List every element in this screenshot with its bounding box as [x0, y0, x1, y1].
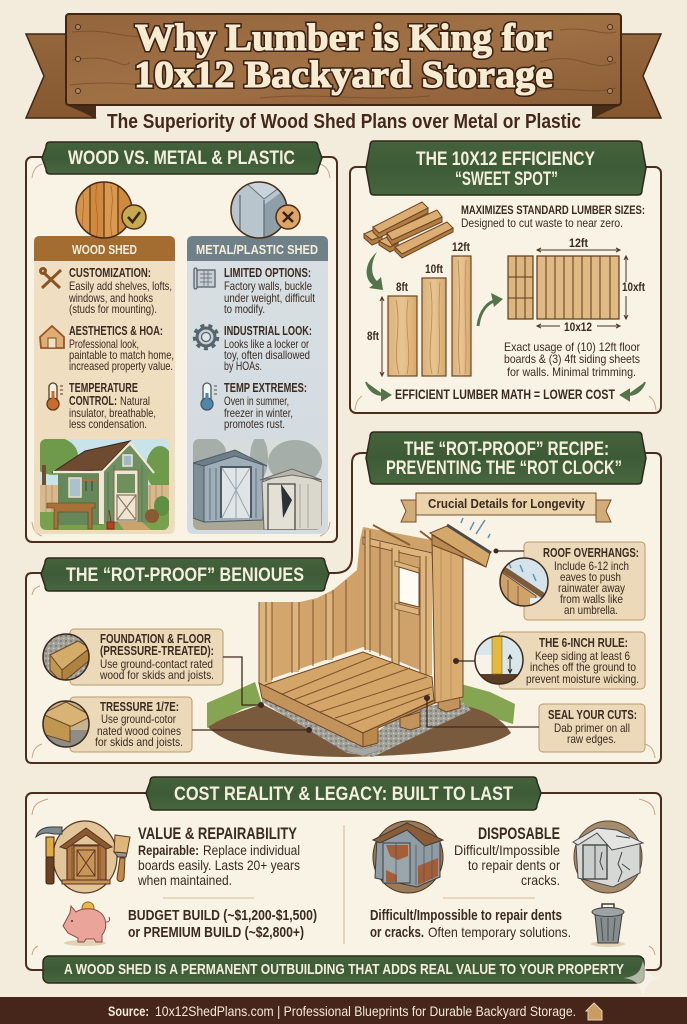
floor and siding layout diagram: 10xft [622, 280, 645, 294]
callout: roof overhangs: eaves to push [560, 570, 621, 584]
disposable text: cracks. [521, 872, 560, 888]
banner: permanent outbuilding statement [43, 956, 644, 983]
limited options item: LIMITED OPTIONS: [224, 266, 311, 280]
temperature control item: TEMPERATURE [69, 381, 138, 395]
metal and plastic shed column [187, 236, 328, 534]
callout: roof overhangs: rainwater away [558, 581, 625, 595]
icon: wood grain circle with check [76, 182, 146, 238]
board lengths diagram: 8ft [396, 280, 408, 294]
disposable text: Difficult/Impossible [454, 842, 560, 858]
panel: wood vs metal and plastic [26, 142, 337, 542]
panel heading [366, 141, 646, 195]
banner right tail [592, 34, 661, 118]
value and repairability text: when maintained. [137, 872, 232, 888]
callout: foundation and floor: wood for skids and joists. [99, 668, 214, 682]
callout: foundation and floor: Use ground-contact rated [100, 657, 213, 671]
disposable text [454, 825, 560, 888]
callout: seal your cuts: SEAL YOUR CUTS: [548, 708, 637, 722]
budget and premium text: BUDGET BUILD (~$1,200-$1,500) [128, 908, 317, 924]
callout: the 6-inch rule: inches off the ground to [530, 660, 636, 674]
icon: piggy bank with coin [63, 902, 110, 946]
panel heading: COST REALITY & LEGACY: BUILT TO LAST [174, 784, 513, 805]
icon: footer house [586, 1003, 602, 1020]
limited options item: to modify. [224, 302, 265, 316]
lumber sizes text [461, 203, 645, 230]
temperature control item: CONTROL: [69, 394, 117, 408]
budget and premium text [128, 908, 317, 941]
value and repairability text: VALUE & REPAIRABILITY [138, 825, 297, 843]
arrow: left math arrow [366, 382, 390, 400]
aesthetics and HOA item [40, 324, 174, 373]
customization item: windows, and hooks [68, 291, 153, 305]
industrial look item: Looks like a locker or [224, 337, 309, 351]
icon: rusty metal shed [373, 821, 443, 893]
callout: tressure: Use ground-cotor [101, 712, 176, 726]
panel frame [26, 157, 337, 542]
ribbon: crucial details: Crucial Details for Longevity [428, 496, 586, 511]
panel: cost reality and legacy [26, 777, 661, 970]
limited options item: Factory walls, buckle [224, 279, 312, 293]
callout: seal your cuts: raw edges. [567, 732, 616, 746]
window opening [399, 567, 419, 607]
icon: crossed tools [40, 268, 61, 288]
icon: lumber pile [364, 202, 453, 258]
aesthetics and HOA item: AESTHETICS & HOA: [69, 324, 163, 338]
watermark sparkle [623, 960, 661, 997]
floor and siding layout diagram: 10x12 [564, 320, 592, 334]
callout: the 6-inch rule: THE 6-INCH RULE: [539, 636, 628, 650]
temp extremes item: Oven in summer, [224, 394, 289, 408]
aesthetics and HOA item: paintable to match home, [69, 348, 174, 362]
value and repairability text: Replace individual [203, 842, 300, 858]
customization item: CUSTOMIZATION: [69, 266, 151, 280]
callout: foundation and floor: (PRESSURE-TREATED): [100, 644, 214, 658]
ribbon: crucial details [401, 493, 611, 522]
panel heading: benefits: THE “ROT-PROOF” BENIOUES [66, 565, 304, 586]
board lengths diagram [367, 240, 471, 376]
callout: the 6-inch rule [475, 632, 645, 689]
arrow: right math arrow [621, 382, 645, 400]
industrial look item: toy, often disallowed [224, 348, 310, 362]
difficult to repair text [370, 908, 571, 941]
customization item: (studs for mounting). [69, 302, 157, 316]
icon: warm thermometer [47, 383, 63, 410]
exact usage text: boards & (3) 4ft siding sheets [504, 352, 640, 366]
footer: Source: [108, 1003, 149, 1019]
callout: roof overhangs: Include 6-12 inch [554, 559, 629, 573]
efficient lumber math statement: EFFICIENT LUMBER MATH = LOWER COST [395, 386, 615, 402]
budget and premium text: or PREMIUM BUILD (~$2,800+) [128, 925, 304, 941]
icon: gear [194, 326, 218, 348]
illustration: damaged metal and plastic sheds [186, 436, 322, 530]
icon: joist on block [42, 701, 92, 750]
footer: 10x12ShedPlans.com | Professional Blueprints for Durable Backyard Storage. [155, 1003, 576, 1019]
panel frame [26, 793, 661, 970]
customization item: Easily add shelves, lofts, [69, 279, 172, 293]
customization item [40, 266, 172, 316]
panel heading: recipe [366, 432, 646, 484]
panel heading: WOOD VS. METAL & PLASTIC [68, 148, 295, 169]
difficult to repair text: Often temporary solutions. [428, 924, 571, 940]
lumber sizes text: Designed to cut waste to near zero. [461, 216, 623, 230]
value and repairability text: Repairable: [138, 842, 199, 858]
callout: roof overhangs: from walls like [560, 592, 623, 606]
callout: roof overhangs: an umbrella. [564, 603, 618, 617]
callout: roof overhangs [498, 542, 645, 620]
panel heading [146, 777, 541, 810]
banner left tail [26, 34, 96, 118]
panel heading: recipe: PREVENTING THE “ROT CLOCK” [386, 458, 622, 479]
callout: seal your cuts [539, 704, 645, 752]
icon: metal corner circle with cross [231, 182, 300, 238]
panel: rot-proof recipe [26, 432, 661, 763]
board lengths diagram: 8ft [367, 329, 379, 343]
callout: foundation and floor [43, 629, 223, 685]
subtitle: The Superiority of Wood Shed Plans over Metal or Plastic [107, 111, 581, 133]
temperature control item: less condensation. [69, 417, 147, 431]
arrow: pile to boards [367, 252, 383, 290]
connector lines with dots [192, 548, 539, 733]
panel heading: recipe: THE “ROT-PROOF” RECIPE: [404, 439, 609, 460]
value and repairability text: boards easily. Lasts 20+ years [138, 857, 300, 873]
illustration: ground [207, 682, 515, 757]
callout: foundation and floor: FOUNDATION & FLOOR [100, 632, 211, 646]
panel heading: benefits [41, 558, 329, 591]
icon: house [40, 326, 64, 348]
temp extremes item: freezer in winter, [224, 406, 293, 420]
disposable text: DISPOSABLE [478, 825, 560, 843]
callout: seal your cuts: Dab primer on all [554, 721, 630, 735]
board lengths diagram: 10ft [425, 262, 443, 276]
aesthetics and HOA item: increased property value. [69, 359, 173, 373]
icon: trash can [591, 904, 625, 947]
exact usage text: for walls. Minimal trimming. [507, 365, 636, 379]
floor and siding layout diagram [508, 236, 645, 334]
temperature control item: Natural [120, 394, 150, 408]
temperature control item [47, 381, 156, 431]
illustration: open shed frame [259, 518, 491, 756]
limited options item: under weight, difficult [224, 291, 316, 305]
temp extremes item [201, 381, 307, 431]
callout: the 6-inch rule: Keep siding at least 6 [535, 649, 630, 663]
exact usage text [504, 340, 640, 379]
panel frame [350, 167, 661, 413]
value and repairability text [137, 825, 300, 888]
callout: the 6-inch rule: prevent moisture wicking. [526, 672, 639, 686]
icon: cracked plastic shed [573, 821, 643, 893]
icon: ruler at siding [475, 636, 523, 686]
icon: treated timber on gravel [43, 634, 90, 683]
industrial look item [194, 324, 312, 373]
industrial look item: by HOAs. [224, 359, 262, 373]
icon: blueprint [194, 268, 215, 289]
temp extremes item: TEMP EXTREMES: [224, 381, 307, 395]
difficult to repair text: Difficult/Impossible to repair dents [370, 908, 562, 924]
arrow: boards to layout [478, 300, 497, 326]
wood shed column: WOOD SHED [72, 242, 137, 257]
metal and plastic shed column: METAL/PLASTIC SHED [196, 242, 318, 257]
callout: tressure [42, 697, 192, 752]
board lengths diagram: 12ft [452, 240, 470, 254]
difficult to repair text: or cracks. [370, 925, 424, 941]
footer [0, 997, 687, 1024]
panel heading: “SWEET SPOT” [455, 169, 558, 190]
title banner [26, 14, 661, 118]
exact usage text: Exact usage of (10) 12ft floor [504, 340, 640, 354]
floor and siding layout diagram: 12ft [569, 236, 588, 250]
callout: roof overhangs: ROOF OVERHANGS: [543, 546, 639, 560]
callout: tressure: nated wood coines [97, 724, 181, 738]
panel: 10x12 efficiency sweet spot [350, 141, 661, 413]
icon: wood shed with hammer and brush [36, 821, 130, 893]
temp extremes item: promotes rust. [224, 417, 285, 431]
wood shed column [34, 236, 175, 534]
limited options item [194, 266, 316, 316]
icon: eave with rain [498, 558, 548, 610]
title line 1: Why Lumber is King for [135, 17, 552, 59]
disposable text: to repair dents or [468, 857, 560, 873]
temperature control item: insulator, breathable, [69, 406, 156, 420]
panel heading [42, 142, 322, 174]
aesthetics and HOA item: Professional look, [69, 337, 139, 351]
callout: tressure: for skids and joists. [95, 735, 183, 749]
illustration: green wood shed [40, 439, 169, 530]
title line 2: 10x12 Backyard Storage [134, 54, 553, 96]
panel heading: THE 10X12 EFFICIENCY [416, 149, 595, 170]
wood plank [66, 14, 621, 105]
callout: tressure: TRESSURE 1/7E: [100, 700, 179, 714]
icon: cold thermometer [201, 383, 217, 410]
industrial look item: INDUSTRIAL LOOK: [224, 324, 312, 338]
panel frame [26, 453, 661, 763]
